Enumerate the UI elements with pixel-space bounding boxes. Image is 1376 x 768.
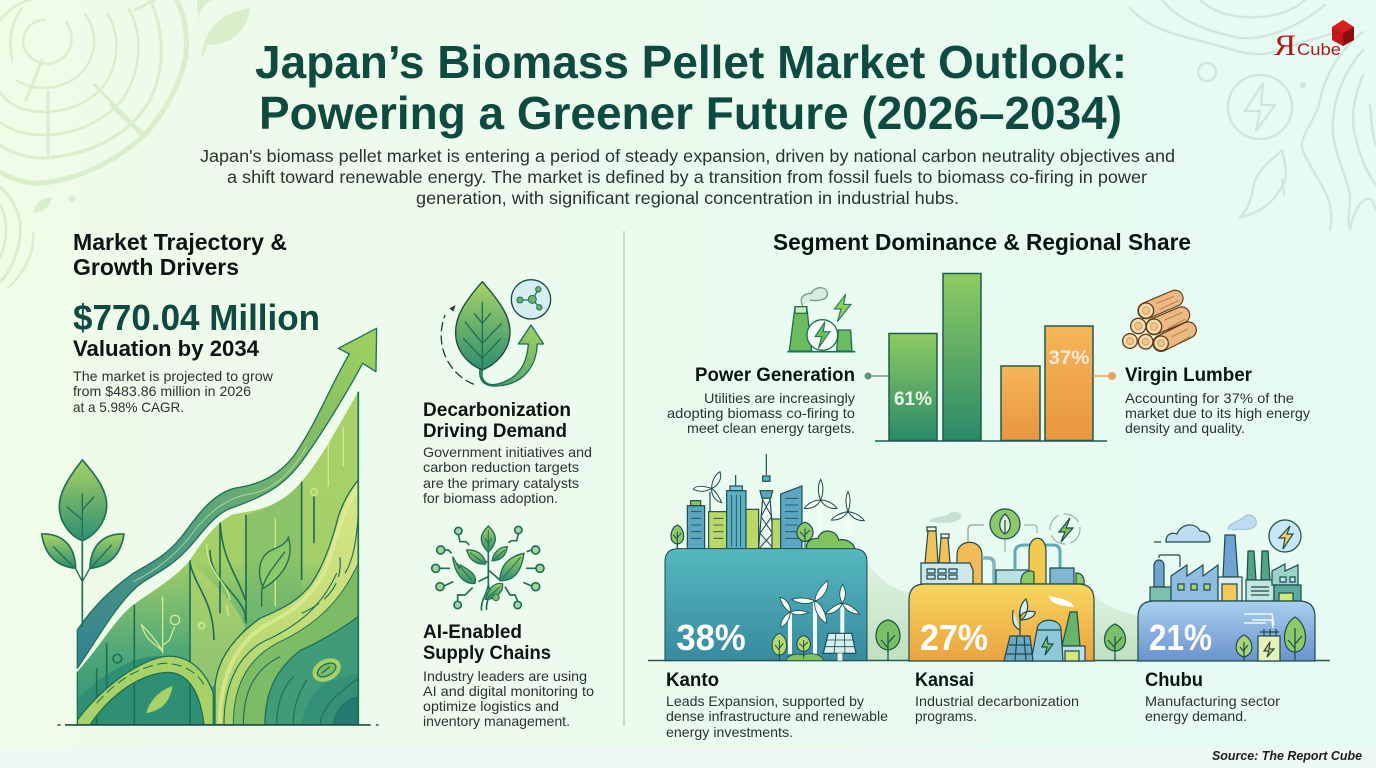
text: virgin lumber: density and quality.: [1125, 420, 1245, 436]
text: AI supply chains: Industry leaders are using: [423, 668, 587, 684]
text: Chubu: energy demand.: [1145, 708, 1247, 724]
heading: market trajectory: Market Trajectory &: [73, 229, 287, 255]
text: decarbonization: Decarbonization: [423, 399, 571, 421]
connector: virgin lumber: [1093, 372, 1116, 380]
text: power generation: adopting biomass co-firing to: [667, 405, 855, 421]
Kanto wind turbines and solar: 38%: [676, 617, 746, 658]
text: Kanto: dense infrastructure and renewable: [666, 708, 888, 724]
bar chart: segment share: [875, 274, 1107, 441]
text: Chubu: Manufacturing sector: [1145, 693, 1280, 709]
heading: segment dominance: Segment Dominance & Regional Share: [773, 229, 1191, 255]
text: AI supply chains: optimize logistics and: [423, 698, 559, 714]
text: power generation: Utilities are increasingly: [704, 390, 855, 406]
small leaf on chart: [259, 537, 290, 588]
text: AI supply chains: AI and digital monitoring to: [423, 683, 594, 699]
connector: power generation: [864, 372, 889, 380]
text: Kansai: Kansai: [915, 669, 974, 691]
left wave band: [77, 656, 213, 725]
text: decarbonization: Driving Demand: [423, 420, 567, 442]
title: [255, 36, 1127, 139]
text: decarbonization: [423, 399, 592, 506]
key figure: valuation: $770.04 Million: [73, 297, 320, 338]
Chubu trees and battery: [1149, 614, 1306, 661]
text: Kanto: Kanto: [666, 669, 719, 691]
intro paragraph: [200, 146, 1175, 208]
text: Kanto: [666, 669, 888, 740]
text: AI supply chains: inventory management.: [423, 713, 570, 729]
heading: market trajectory: Growth Drivers: [73, 254, 239, 280]
text: power generation: meet clean energy targets.: [687, 420, 855, 436]
intro paragraph: generation, with significant regional concentration in industrial hubs.: [416, 188, 959, 208]
text: projection: from $483.86 million in 2026: [73, 383, 251, 399]
logo: RCube: [1274, 20, 1354, 62]
text: AI supply chains: [423, 621, 594, 729]
icon: decarbonization leaf and arrow: [441, 280, 551, 386]
text: decarbonization: are the primary catalysts: [423, 475, 579, 491]
regional hills and ground: [648, 563, 1330, 660]
background: tree rings top left: [0, 0, 187, 288]
background: leaves top left: [33, 0, 250, 213]
text: Kanto: Leads Expansion, supported by: [666, 693, 864, 709]
text: AI supply chains: Supply Chains: [423, 642, 551, 664]
title: Japan’s Biomass Pellet Market Outlook:: [255, 36, 1127, 88]
text: projection: [73, 368, 274, 415]
intro paragraph: Japan's biomass pellet market is entering a period of steady expansion, driven by national carbon neutrality objectives and: [200, 146, 1175, 166]
Kansai power icons: [920, 596, 1085, 661]
key figure: valuation: Valuation by 2034: [73, 336, 260, 361]
text: decarbonization: for biomass adoption.: [423, 490, 558, 506]
tree between Kansai and Chubu: [1104, 624, 1126, 661]
text: power generation: [667, 364, 855, 436]
text: Kanto: energy investments.: [666, 724, 793, 740]
Kansai industrial skyline: [921, 509, 1084, 584]
bar chart: segment share: 37%: [1048, 348, 1090, 369]
text: Kansai: Industrial decarbonization: [915, 693, 1079, 709]
Chubu factory skyline: [1150, 515, 1301, 601]
text: Chubu: Chubu: [1145, 669, 1203, 691]
text: virgin lumber: Virgin Lumber: [1125, 364, 1252, 386]
text: Kansai: programs.: [915, 708, 977, 724]
icon: power plant: [787, 288, 855, 352]
text: power generation: Power Generation: [695, 364, 855, 386]
icon: log pile: [1123, 297, 1190, 351]
chart: growth arrow illustration: [42, 328, 379, 725]
source note: Source: The Report Cube: [1212, 749, 1362, 763]
Chubu trees and battery: 21%: [1149, 617, 1212, 658]
title: Powering a Greener Future (2026–2034): [259, 87, 1122, 139]
growth ribbon arrow: [77, 328, 377, 668]
area under growth curve: [77, 392, 358, 725]
intro paragraph: a shift toward renewable energy. The market is defined by a transition from fossil fuels to biomass co-firing in power: [227, 167, 1147, 187]
text: virgin lumber: Accounting for 37% of the: [1125, 390, 1294, 406]
tree between Kanto and Kansai: [876, 620, 900, 661]
region: Kansai illustration: [909, 509, 1094, 661]
icon: sprout: [42, 460, 124, 627]
panel: segment dominance and regional share: [648, 229, 1330, 740]
text: decarbonization: Government initiatives and: [423, 444, 592, 460]
bar chart: segment share: 61%: [894, 389, 932, 410]
Kanto wind turbines and solar: [676, 581, 860, 661]
panel: market trajectory and growth drivers: [42, 229, 594, 729]
region: Chubu illustration: [1138, 515, 1315, 661]
Kanto skyline: [671, 454, 864, 549]
key figure: valuation: [73, 297, 320, 361]
large right wave: [215, 480, 358, 725]
logo: RCube: Я: [1274, 29, 1296, 62]
icon: AI circuit plant: [432, 526, 544, 611]
baseline: [65, 722, 371, 727]
region: Kanto illustration: [665, 454, 867, 661]
Kanto block: [665, 549, 867, 661]
text: projection: at a 5.98% CAGR.: [73, 399, 184, 415]
logo: RCube: Cube: [1297, 40, 1341, 59]
heading: market trajectory: [73, 229, 287, 280]
background: contour lines top right: [1130, 0, 1376, 230]
text: Chubu: [1145, 669, 1280, 724]
text: projection: The market is projected to grow: [73, 368, 274, 384]
text: Kansai: [915, 669, 1079, 724]
text: decarbonization: carbon reduction targets: [423, 459, 579, 475]
Kansai block: [909, 584, 1094, 661]
text: AI supply chains: AI-Enabled: [423, 621, 522, 643]
Kansai power icons: 27%: [920, 617, 988, 658]
text: virgin lumber: market due to its high energy: [1125, 405, 1310, 421]
Chubu block: [1138, 601, 1315, 661]
text: virgin lumber: [1125, 364, 1310, 436]
